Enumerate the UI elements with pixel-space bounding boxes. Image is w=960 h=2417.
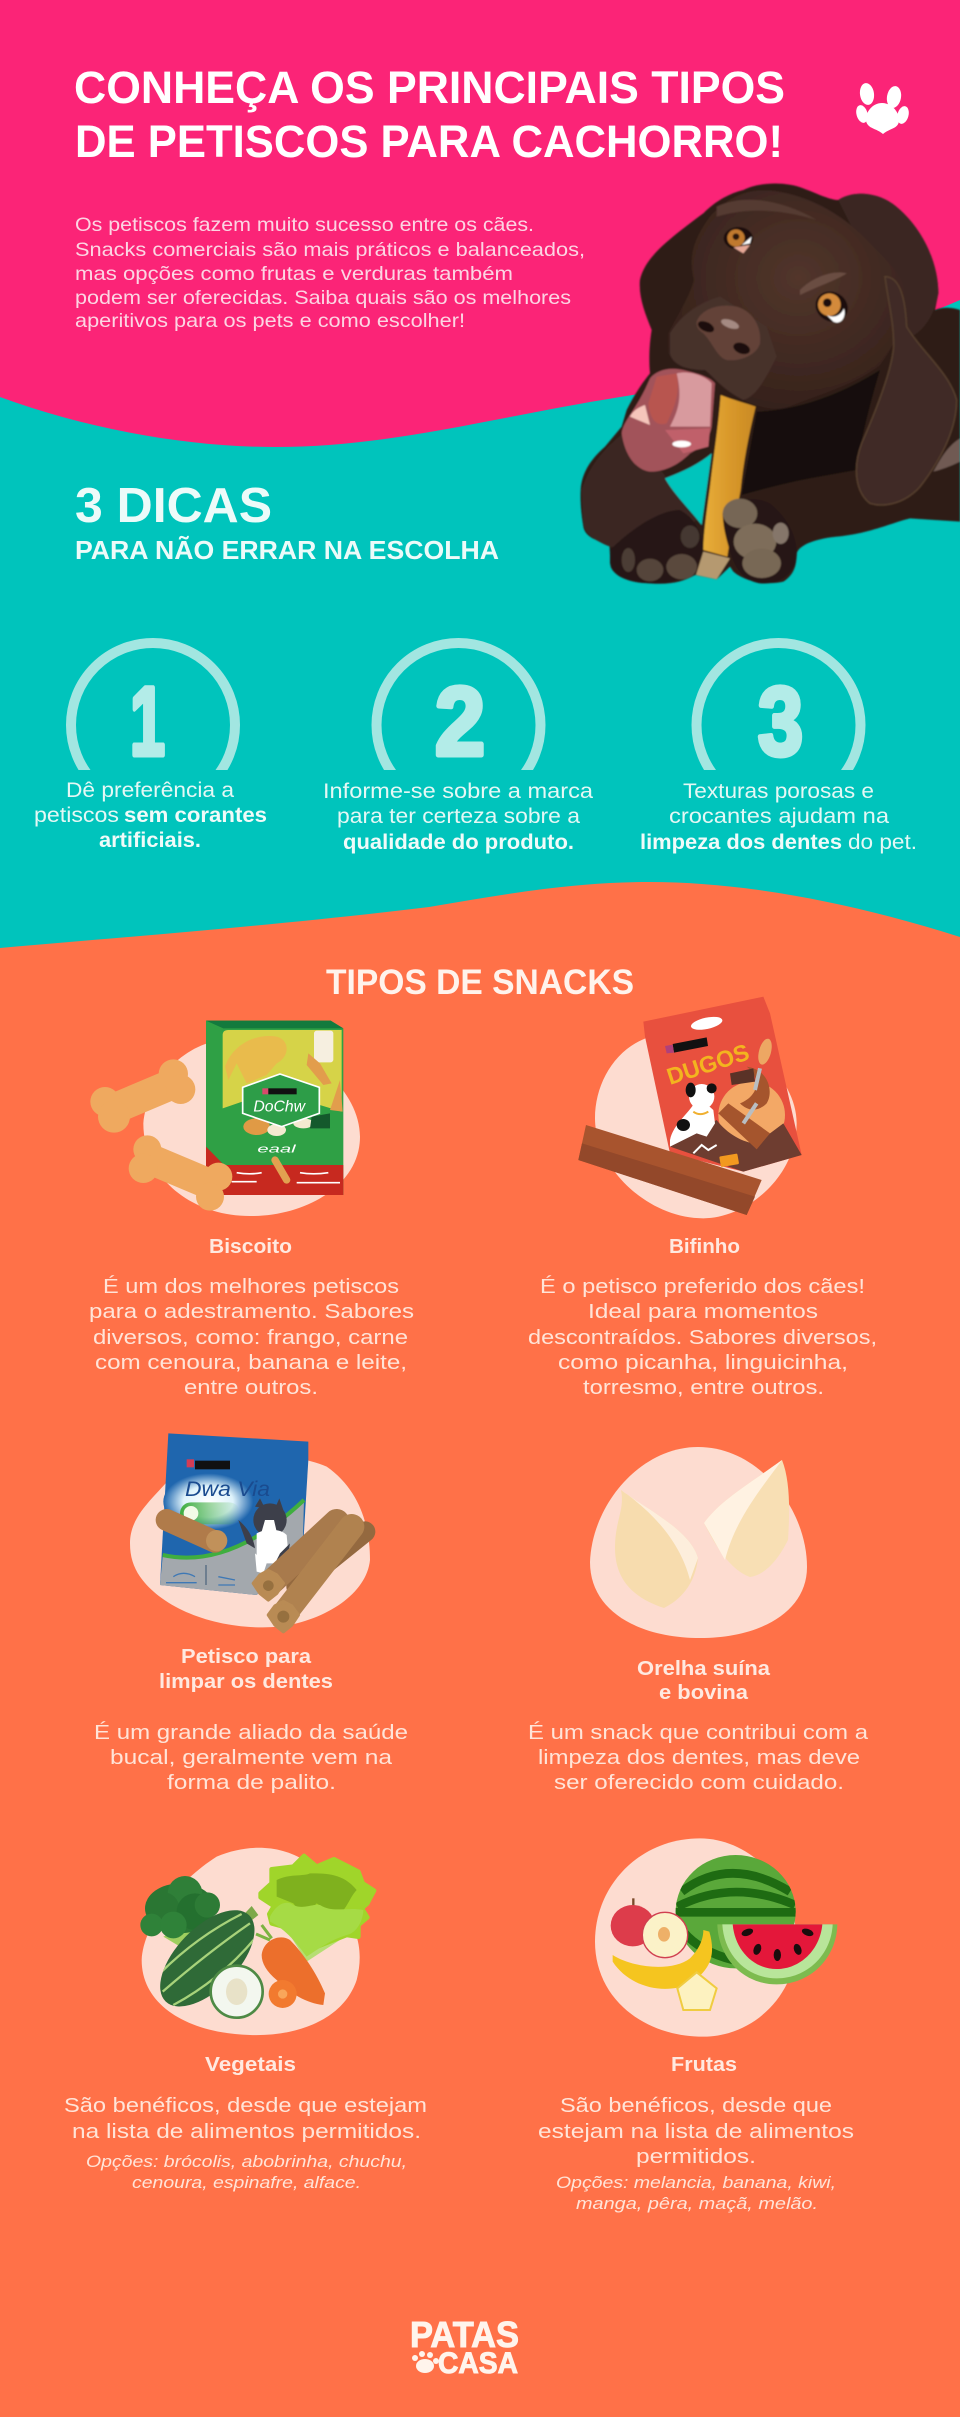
- hanging ear: [856, 277, 957, 505]
- tip 2 text: Informe-se sobre a marca: [323, 780, 593, 803]
- zucchini: [160, 1906, 258, 2006]
- text: petisco para limpar os dentes: bucal, geralmente vem na: [110, 1746, 393, 1769]
- icon: pig and cow ears: [590, 1447, 807, 1638]
- number 3 badge: [692, 638, 866, 770]
- head: [668, 190, 905, 409]
- tip 1 text: Dê preferência a: [66, 779, 234, 802]
- text: vegetais: São benéficos, desde que estejam: [64, 2094, 427, 2117]
- tip 2 text: qualidade do produto.: [343, 831, 574, 854]
- dog body silhouette: [581, 184, 960, 584]
- icon: bifinho pack and stick: DUGOS: [664, 1039, 752, 1090]
- text: frutas: estejam na lista de alimentos: [538, 2120, 854, 2143]
- text: orelha suína e bovina: [528, 1657, 869, 1794]
- text: petisco para limpar os dentes: Petisco para: [181, 1645, 312, 1668]
- text: biscoito: É um dos melhores petiscos: [103, 1275, 399, 1298]
- upper bone: [90, 1059, 195, 1133]
- panel: tip 2: [323, 643, 593, 854]
- lettuce: [261, 1856, 374, 1962]
- intro paragraph: mas opções como frutas e verduras também: [75, 263, 513, 285]
- number 3 badge: 3: [758, 667, 803, 776]
- title: DE PETISCOS PARA CACHORRO!: [75, 116, 783, 167]
- left ear: [640, 213, 703, 333]
- tip 1 text: petiscos: [34, 804, 119, 827]
- text: vegetais: Opções: brócolis, abobrinha, chuchu,: [86, 2153, 407, 2171]
- number 1 badge: [66, 638, 240, 770]
- tip 3 text: do pet.: [848, 831, 917, 854]
- title: [74, 62, 785, 167]
- background: orange section: [0, 882, 960, 2417]
- tip 2 text: [323, 780, 593, 854]
- text: petisco para limpar os dentes: [94, 1645, 408, 1794]
- shadow under chin: [742, 370, 880, 495]
- tip 1 text: artificiais.: [99, 829, 201, 852]
- icon: biscoito box and bones: DoChw: [253, 1098, 306, 1115]
- lower bone: [129, 1135, 232, 1211]
- text: bifinho: descontraídos. Sabores diversos,: [528, 1326, 877, 1349]
- text: vegetais: cenoura, espinafre, alface.: [132, 2174, 361, 2192]
- tip 1 text: sem corantes: [124, 804, 267, 827]
- text: petisco para limpar os dentes: forma de palito.: [167, 1771, 336, 1794]
- body highlight: [933, 438, 960, 472]
- stick bundle: [268, 1522, 365, 1615]
- apple: [611, 1898, 688, 1958]
- text: bifinho: Bifinho: [669, 1235, 740, 1258]
- number 1 badge: 1: [130, 667, 165, 776]
- icon: fruits: [595, 1838, 837, 2037]
- intro paragraph: [75, 214, 585, 332]
- title: CONHEÇA OS PRINCIPAIS TIPOS: [74, 62, 785, 113]
- text: biscoito: entre outros.: [184, 1376, 318, 1399]
- tip 3 text: crocantes ajudam na: [669, 805, 889, 828]
- intro paragraph: podem ser oferecidas. Saiba quais são os melhores: [75, 287, 571, 309]
- intro paragraph: Os petiscos fazem muito sucesso entre os cães.: [75, 214, 534, 236]
- text: orelha suína e bovina: Orelha suína: [637, 1657, 771, 1680]
- text: biscoito: Biscoito: [209, 1235, 292, 1258]
- muzzle shading: [670, 297, 777, 400]
- text: frutas: manga, pêra, maçã, melão.: [576, 2195, 818, 2213]
- banana: [613, 1930, 717, 2010]
- number 2 badge: 2: [435, 667, 485, 776]
- icon: biscoito box and bones: eaal: [257, 1144, 297, 1156]
- text: orelha suína e bovina: É um snack que contribui com a: [528, 1721, 869, 1744]
- text: bifinho: torresmo, entre outros.: [583, 1376, 824, 1399]
- text: frutas: permitidos.: [636, 2145, 756, 2168]
- yellow chew stick: [703, 395, 756, 557]
- icon: bifinho pack and stick: [578, 997, 802, 1218]
- carrot: [256, 1925, 325, 2008]
- text: vegetais: [64, 2053, 427, 2192]
- heading: 3 dicas: 3 DICAS: [75, 479, 272, 533]
- tip 3 text: limpeza dos dentes: [640, 831, 842, 854]
- text: bifinho: como picanha, linguicinha,: [558, 1351, 848, 1374]
- small dog on pack: [670, 1083, 717, 1147]
- text: biscoito: [89, 1235, 414, 1399]
- text: biscoito: diversos, como: frango, carne: [93, 1326, 408, 1349]
- right paw: [723, 499, 797, 584]
- text: vegetais: na lista de alimentos permitidos.: [72, 2120, 421, 2143]
- left paw: [610, 510, 703, 583]
- heading: tipos de snacks: TIPOS DE SNACKS: [326, 963, 634, 1002]
- number 2 badge: [372, 638, 546, 770]
- text: petisco para limpar os dentes: limpar os dentes: [159, 1670, 333, 1693]
- text: orelha suína e bovina: e bovina: [659, 1681, 749, 1704]
- icon: dental stick pack: Dwa Via: [185, 1477, 270, 1501]
- dog photo illustration: [581, 184, 960, 584]
- panel: tip 3: [640, 643, 917, 854]
- text: bifinho: [528, 1235, 877, 1399]
- heading: 3 dicas: PARA NÃO ERRAR NA ESCOLHA: [75, 535, 499, 565]
- intro paragraph: aperitivos para os pets e como escolher!: [75, 310, 465, 332]
- text: bifinho: É o petisco preferido dos cães!: [540, 1275, 865, 1298]
- text: biscoito: com cenoura, banana e leite,: [95, 1351, 407, 1374]
- text: vegetais: Vegetais: [205, 2053, 296, 2076]
- text: frutas: São benéficos, desde que: [560, 2094, 832, 2117]
- text: orelha suína e bovina: ser oferecido com cuidado.: [554, 1771, 844, 1794]
- tip 3 text: Texturas porosas e: [683, 780, 874, 803]
- panel: tip 1: [34, 643, 267, 852]
- background: teal section: [0, 300, 960, 1000]
- left foreleg: [582, 433, 697, 550]
- broccoli: [140, 1876, 220, 1951]
- heading: 3 dicas: [75, 479, 499, 565]
- icon: vegetables: [140, 1848, 374, 2035]
- text: frutas: Opções: melancia, banana, kiwi,: [556, 2174, 836, 2192]
- stick end: [696, 552, 730, 579]
- text: frutas: Frutas: [671, 2053, 737, 2076]
- icon: dental stick pack: [130, 1433, 370, 1632]
- small collie on pack: [238, 1498, 290, 1573]
- tip 2 text: para ter certeza sobre a: [337, 805, 580, 828]
- logo: patas da casa: PATAS: [410, 2314, 519, 2355]
- icon: paw: [854, 82, 911, 134]
- whole watermelon: [675, 1855, 797, 1968]
- dog eyes: [724, 227, 853, 328]
- watermelon slice: [717, 1924, 837, 1984]
- text: bifinho: Ideal para momentos: [588, 1300, 818, 1323]
- brow highlights: [800, 272, 847, 295]
- intro paragraph: Snacks comerciais são mais práticos e balanceados,: [75, 239, 585, 261]
- logo: patas da casa: [410, 2314, 519, 2380]
- chayote slice: [211, 1966, 263, 2018]
- tip 1 text: [34, 779, 267, 852]
- icon: biscoito box and bones: [90, 1021, 360, 1216]
- tip 3 text: [640, 780, 917, 854]
- text: frutas: [538, 2053, 854, 2213]
- dog mouth: [622, 369, 715, 472]
- teal gap between leg and stick: [665, 453, 712, 525]
- text: petisco para limpar os dentes: É um grande aliado da saúde: [94, 1721, 408, 1744]
- dog nose: [697, 306, 760, 360]
- text: orelha suína e bovina: limpeza dos dentes, mas deve: [538, 1746, 860, 1769]
- background: pink header: [0, 0, 960, 520]
- right ear back: [838, 194, 938, 337]
- logo: patas da casa: CASA: [438, 2347, 518, 2380]
- text: biscoito: para o adestramento. Sabores: [89, 1300, 414, 1323]
